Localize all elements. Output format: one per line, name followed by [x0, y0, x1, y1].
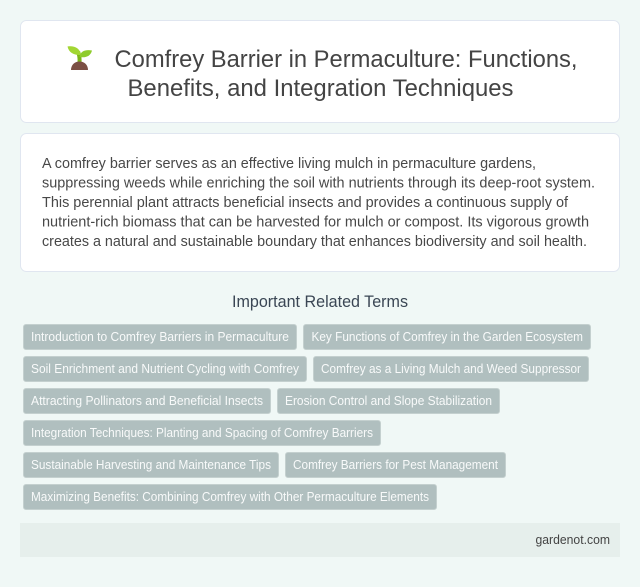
tag list	[24, 324, 590, 510]
tag: Attracting Pollinators and Beneficial Insects	[31, 394, 263, 408]
title: Benefits, and Integration Techniques	[128, 75, 514, 102]
tag	[286, 452, 506, 478]
tag	[24, 324, 296, 350]
tag	[24, 356, 306, 382]
heading: important related terms: Important Related Terms	[232, 293, 408, 311]
tag: Maximizing Benefits: Combining Comfrey with Other Permaculture Elements	[31, 490, 429, 504]
description text: This perennial plant attracts beneficial insects and provides a continuous supply of	[42, 195, 569, 211]
tag: Soil Enrichment and Nutrient Cycling with Comfrey	[31, 362, 300, 376]
panel: description	[20, 134, 620, 272]
tag: Sustainable Harvesting and Maintenance Tips	[31, 458, 271, 472]
tag	[314, 356, 588, 382]
description text: suppressing weeds while enriching the soil with nutrients through its deep-root system.	[42, 176, 595, 192]
tag: Comfrey Barriers for Pest Management	[293, 458, 498, 472]
tag	[24, 420, 380, 446]
title	[114, 46, 578, 102]
tag	[304, 324, 590, 350]
header panel	[20, 20, 620, 122]
icon: sprout	[68, 46, 92, 70]
tag	[24, 484, 436, 510]
tag: Comfrey as a Living Mulch and Weed Suppressor	[321, 362, 581, 376]
description text	[42, 156, 595, 250]
footer	[20, 523, 620, 557]
description text: A comfrey barrier serves as an effective living mulch in permaculture gardens,	[42, 156, 536, 172]
tag	[24, 452, 278, 478]
tag: Introduction to Comfrey Barriers in Permaculture	[31, 330, 289, 344]
description text: creates a natural and sustainable boundary that enhances biodiversity and soil health.	[42, 234, 587, 250]
tag: Key Functions of Comfrey in the Garden Ecosystem	[312, 330, 583, 344]
tag	[278, 388, 500, 414]
tag: Erosion Control and Slope Stabilization	[285, 394, 492, 408]
tag	[24, 388, 270, 414]
footer source: gardenot.com	[536, 533, 610, 547]
description text: nutrient-rich biomass that can be harvested for mulch or compost. Its vigorous growth	[42, 214, 589, 230]
title: Comfrey Barrier in Permaculture: Functions,	[114, 46, 578, 73]
tag: Integration Techniques: Planting and Spacing of Comfrey Barriers	[31, 426, 373, 440]
